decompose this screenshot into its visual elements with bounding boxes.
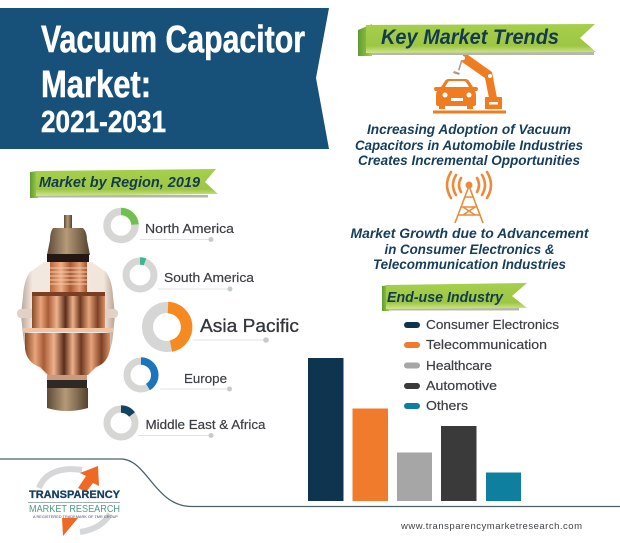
icon: car and robot arm: [433, 55, 506, 114]
bar chart: end-use industry: [308, 358, 521, 501]
label: Middle East & Africa: Middle East & Africa: [146, 417, 266, 432]
legend: end-use industry: Telecommunication: [426, 337, 547, 352]
text: automobile trend: [355, 122, 583, 168]
chart: South America donut: [126, 261, 154, 289]
logo: Transparency Market Research: MARKET RESEARCH: [29, 504, 120, 515]
icon: telecom tower: [447, 172, 491, 223]
label: Asia Pacific: [193, 316, 299, 343]
title banner: [0, 8, 329, 149]
text: telecom trend: [350, 226, 589, 272]
heading ribbon: Market by Region: [30, 169, 218, 198]
text: automobile trend: Creates Incremental Opportunities: [358, 153, 580, 168]
heading ribbon: End-use Industry: End-use Industry: [387, 289, 504, 306]
label: Middle East & Africa: [138, 417, 266, 438]
heading ribbon: End-use Industry: [382, 283, 527, 311]
label: South America: South America: [164, 270, 255, 285]
text: automobile trend: Capacitors in Automobile Industries: [355, 138, 583, 153]
heading ribbon: Key Market Trends: [358, 24, 596, 56]
chart: North America donut: [107, 211, 135, 240]
chart: Asia Pacific donut: [148, 308, 187, 346]
chart: Europe donut: [127, 361, 155, 389]
heading ribbon: Market by Region: Market by Region, 2019: [39, 174, 201, 191]
label: Europe: Europe: [184, 371, 227, 386]
label: Europe: [160, 371, 232, 392]
legend: end-use industry: [404, 317, 560, 413]
text: automobile trend: Increasing Adoption of Vacuum: [367, 122, 571, 137]
label: Asia Pacific: Asia Pacific: [200, 316, 299, 336]
logo: Transparency Market Research: TRANSPARENCY: [29, 489, 121, 501]
logo: Transparency Market Research: A REGISTERED TRADEMARK OF TMR GROUP: [33, 515, 119, 519]
label: North America: [140, 221, 235, 242]
title text: Market:: [41, 64, 151, 106]
text: website url: www.transparencymarketresearch.com: [400, 521, 582, 532]
legend: end-use industry: Automotive: [426, 378, 497, 393]
logo: Transparency Market Research: [28, 466, 121, 536]
title text: Vacuum Capacitor: [41, 19, 305, 61]
title text: [41, 19, 305, 139]
label: South America: [158, 270, 255, 292]
text: telecom trend: Market Growth due to Advancement: [350, 226, 589, 241]
illustration: vacuum capacitor: [17, 215, 118, 411]
legend: end-use industry: Healthcare: [426, 358, 492, 373]
legend: end-use industry: Others: [426, 398, 469, 413]
chart: Middle East & Africa donut: [107, 409, 135, 437]
title text: 2021-2031: [41, 104, 166, 139]
text: telecom trend: in Consumer Electronics &: [384, 242, 554, 257]
heading ribbon: Key Market Trends: Key Market Trends: [381, 26, 559, 49]
legend: end-use industry: Consumer Electronics: [426, 317, 560, 332]
label: North America: North America: [145, 221, 235, 236]
text: telecom trend: Telecommunication Industries: [373, 257, 566, 272]
